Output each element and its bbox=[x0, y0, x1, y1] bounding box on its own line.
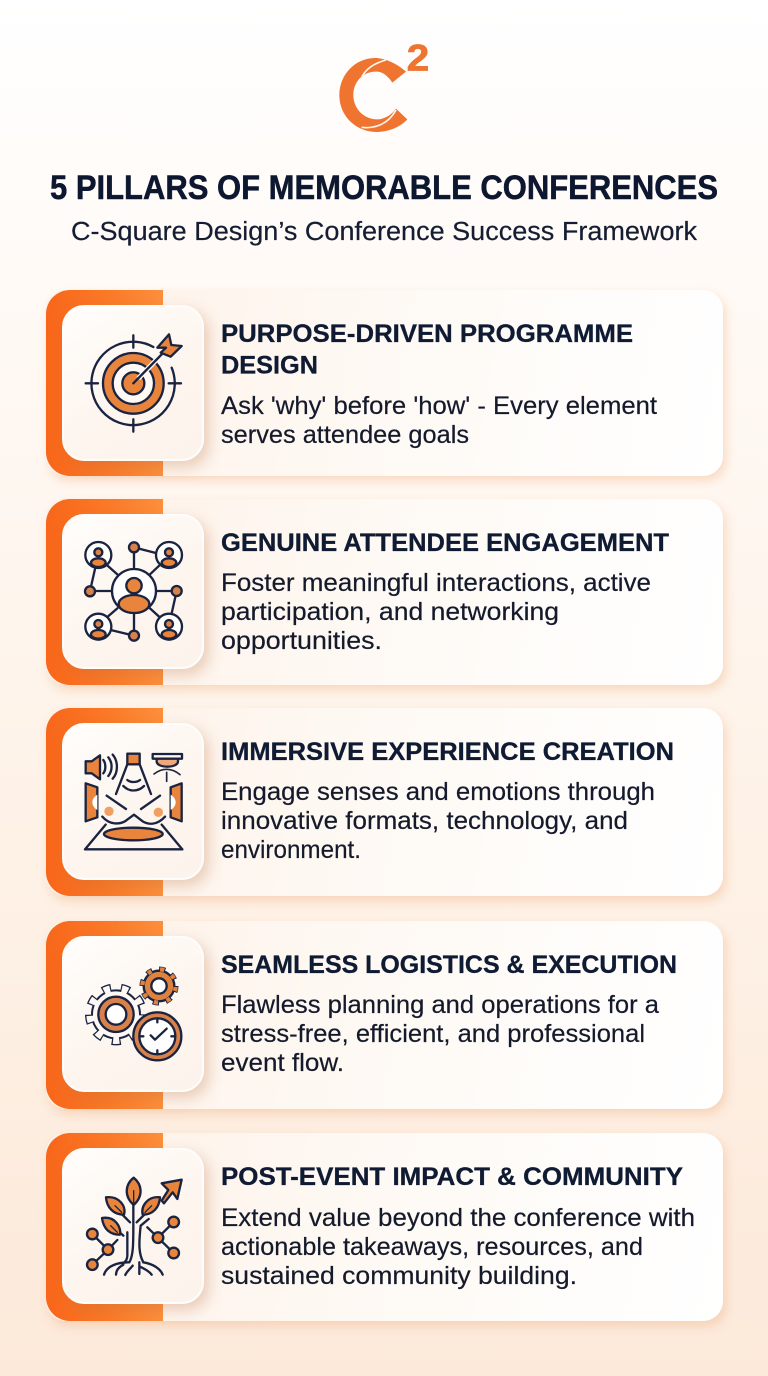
heading bbox=[221, 320, 633, 380]
description: Extend value beyond the conference with bbox=[221, 1204, 695, 1232]
description: serves attendee goals bbox=[221, 421, 469, 449]
description bbox=[221, 569, 651, 655]
card background bbox=[46, 1133, 723, 1321]
logo: C-squared bbox=[339, 37, 429, 132]
description: Flawless planning and operations for a bbox=[221, 991, 659, 1019]
description: Engage senses and emotions through bbox=[221, 778, 655, 806]
logo: C-squared: 2 bbox=[407, 37, 429, 79]
icon tile: gears and clock bbox=[62, 936, 204, 1092]
panel: pillar 3 bbox=[44, 708, 730, 906]
heading: DESIGN bbox=[221, 352, 318, 380]
description: event flow. bbox=[221, 1049, 344, 1077]
card background bbox=[46, 921, 723, 1109]
heading: PURPOSE-DRIVEN PROGRAMME bbox=[221, 320, 633, 348]
description: environment. bbox=[221, 836, 361, 864]
icon tile: target with arrow bbox=[62, 305, 204, 461]
orange tab bbox=[46, 1133, 163, 1321]
heading: GENUINE ATTENDEE ENGAGEMENT bbox=[221, 528, 669, 556]
orange tab bbox=[46, 499, 163, 685]
icon tile: immersive stage bbox=[62, 723, 204, 880]
card background bbox=[46, 499, 723, 685]
orange tab bbox=[46, 708, 163, 896]
description: stress-free, efficient, and professional bbox=[221, 1020, 645, 1048]
description bbox=[220, 392, 657, 449]
description bbox=[221, 778, 655, 864]
panel: pillar 2 bbox=[44, 499, 730, 694]
description: participation, and networking bbox=[221, 598, 559, 626]
icon tile: people network bbox=[62, 514, 204, 669]
orange tab bbox=[46, 290, 163, 476]
description: Foster meaningful interactions, active bbox=[221, 569, 651, 597]
description: innovative formats, technology, and bbox=[221, 807, 628, 835]
description bbox=[221, 1204, 695, 1290]
icon tile: growing plant and network bbox=[62, 1148, 204, 1304]
panel: pillar 5 bbox=[45, 1133, 730, 1330]
description bbox=[221, 991, 660, 1077]
orange tab bbox=[46, 921, 163, 1109]
card background bbox=[46, 708, 723, 896]
description: sustained community building. bbox=[221, 1262, 577, 1290]
subtitle: C-Square Design’s Conference Success Framework bbox=[71, 218, 697, 246]
description: opportunities. bbox=[221, 627, 382, 655]
panel: pillar 4 bbox=[44, 921, 730, 1118]
heading: IMMERSIVE EXPERIENCE CREATION bbox=[221, 738, 674, 766]
heading: SEAMLESS LOGISTICS & EXECUTION bbox=[221, 951, 677, 979]
heading: POST-EVENT IMPACT & COMMUNITY bbox=[221, 1163, 683, 1191]
description: Ask 'why' before 'how' - Every element bbox=[221, 392, 657, 420]
description: actionable takeaways, resources, and bbox=[221, 1233, 643, 1261]
card background bbox=[46, 290, 723, 476]
panel: pillar 1 bbox=[44, 290, 731, 486]
title: 5 PILLARS OF MEMORABLE CONFERENCES bbox=[50, 169, 718, 207]
